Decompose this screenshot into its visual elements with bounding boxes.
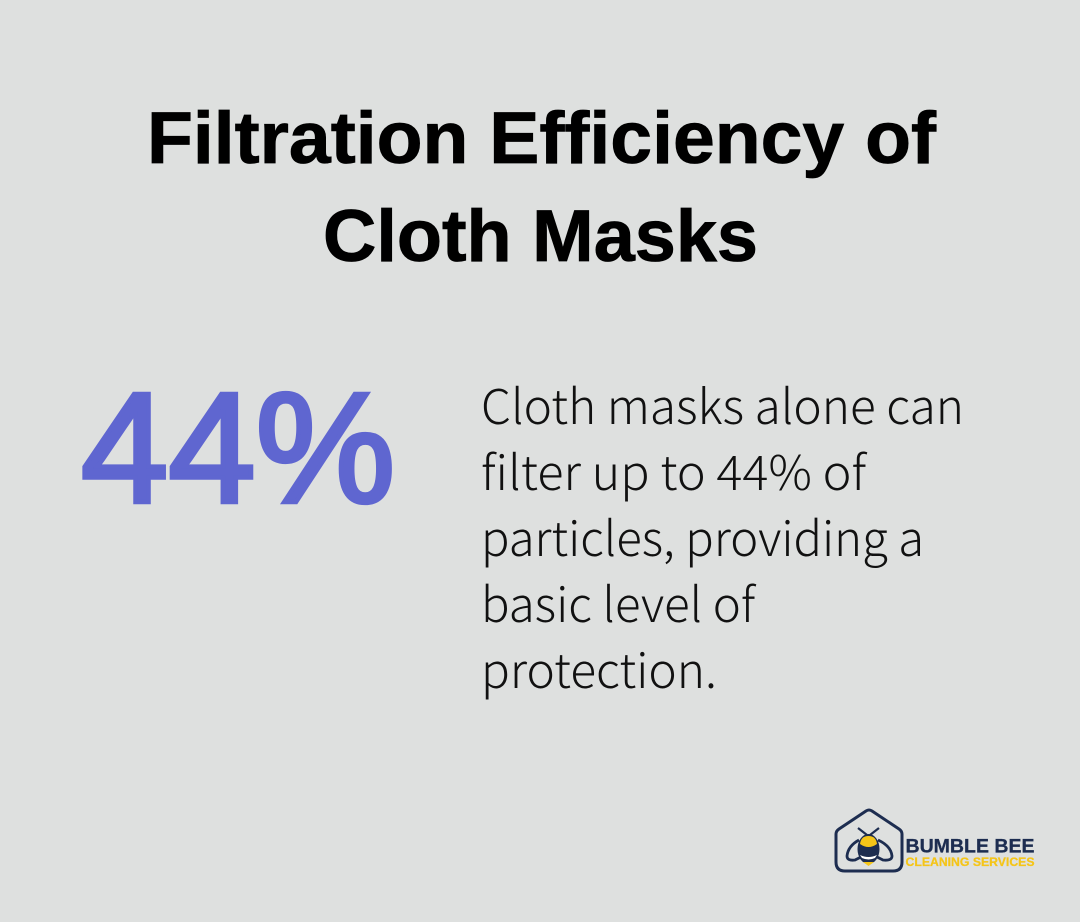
description text: filter up to 44% of — [481, 434, 868, 504]
icon: house outline with bee — [836, 810, 902, 871]
big stat: 44%: 44% — [81, 361, 395, 536]
description text: Cloth masks alone can — [481, 368, 964, 438]
title: Filtration Efficiency of — [147, 98, 937, 179]
description text — [481, 368, 964, 702]
logo tagline: CLEANING SERVICES — [906, 855, 1034, 869]
logo wordmark: BUMBLE BEE — [906, 836, 1034, 858]
description text: protection. — [481, 632, 717, 702]
title — [147, 98, 937, 277]
description text: particles, providing a — [481, 500, 924, 570]
title: Cloth Masks — [323, 196, 758, 277]
description text: basic level of — [481, 566, 757, 636]
logo: Bumble Bee Cleaning Services — [836, 810, 1034, 871]
